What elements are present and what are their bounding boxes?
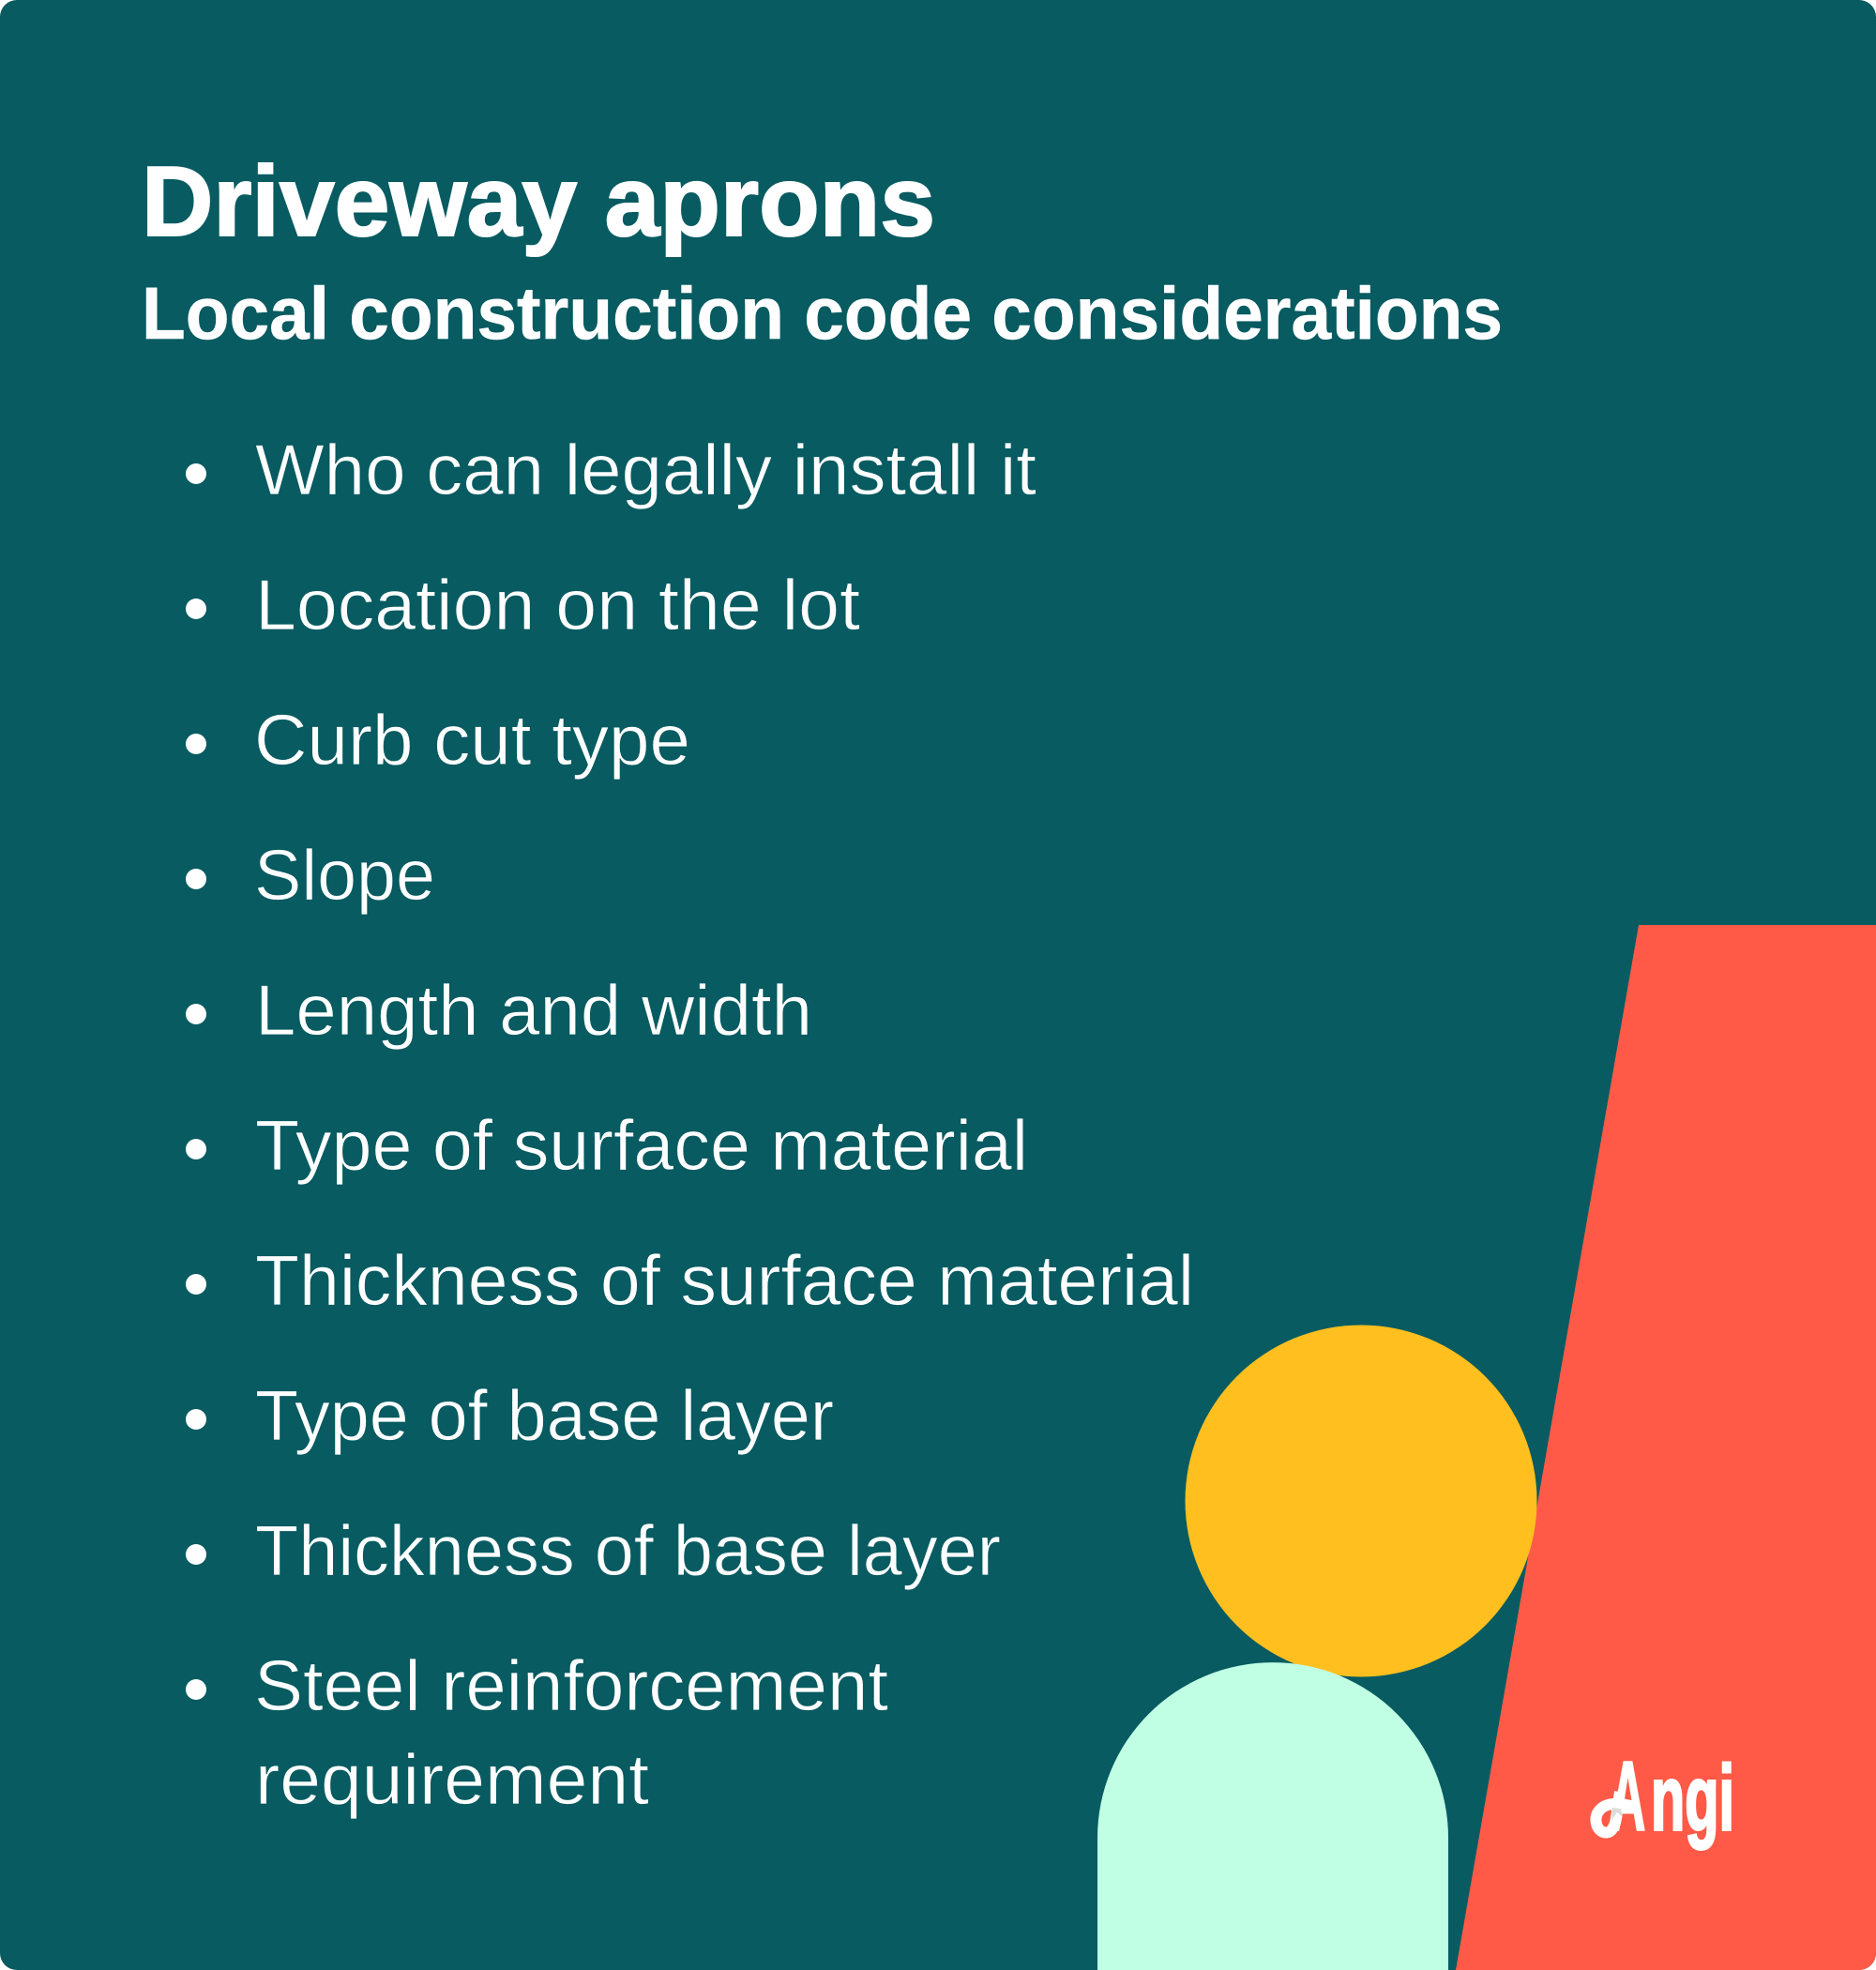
title: Driveway aprons xyxy=(142,146,935,257)
list item: curb cut: Curb cut type xyxy=(254,701,690,780)
logo: Angi xyxy=(1596,1743,1734,1852)
logo: Angi: A xyxy=(1611,1743,1645,1852)
list item: surface type: Type of surface material xyxy=(255,1106,1028,1186)
list item: steel reinforcement: Steel reinforcement xyxy=(254,1646,888,1726)
shape: yellow circle xyxy=(1186,1325,1536,1677)
list item: slope: Slope xyxy=(254,836,435,916)
bullet list xyxy=(186,431,1194,1820)
list item: base type: Type of base layer xyxy=(255,1376,834,1456)
list item: installer: Who can legally install it xyxy=(255,431,1036,510)
subtitle: Local construction code considerations xyxy=(142,271,1503,355)
list item: length and width: Length and width xyxy=(255,971,812,1051)
list item: location: Location on the lot xyxy=(255,566,860,645)
list item: steel reinforcement: requirement xyxy=(255,1740,649,1820)
list item: steel reinforcement xyxy=(186,1646,888,1820)
shape: mint arch xyxy=(1097,1662,1448,1970)
list item: base thickness: Thickness of base layer xyxy=(255,1511,1001,1591)
shape: coral slanted block xyxy=(1456,925,1876,1970)
logo: Angi: ngi xyxy=(1651,1747,1734,1850)
list item: surface thickness: Thickness of surface material xyxy=(255,1241,1194,1321)
